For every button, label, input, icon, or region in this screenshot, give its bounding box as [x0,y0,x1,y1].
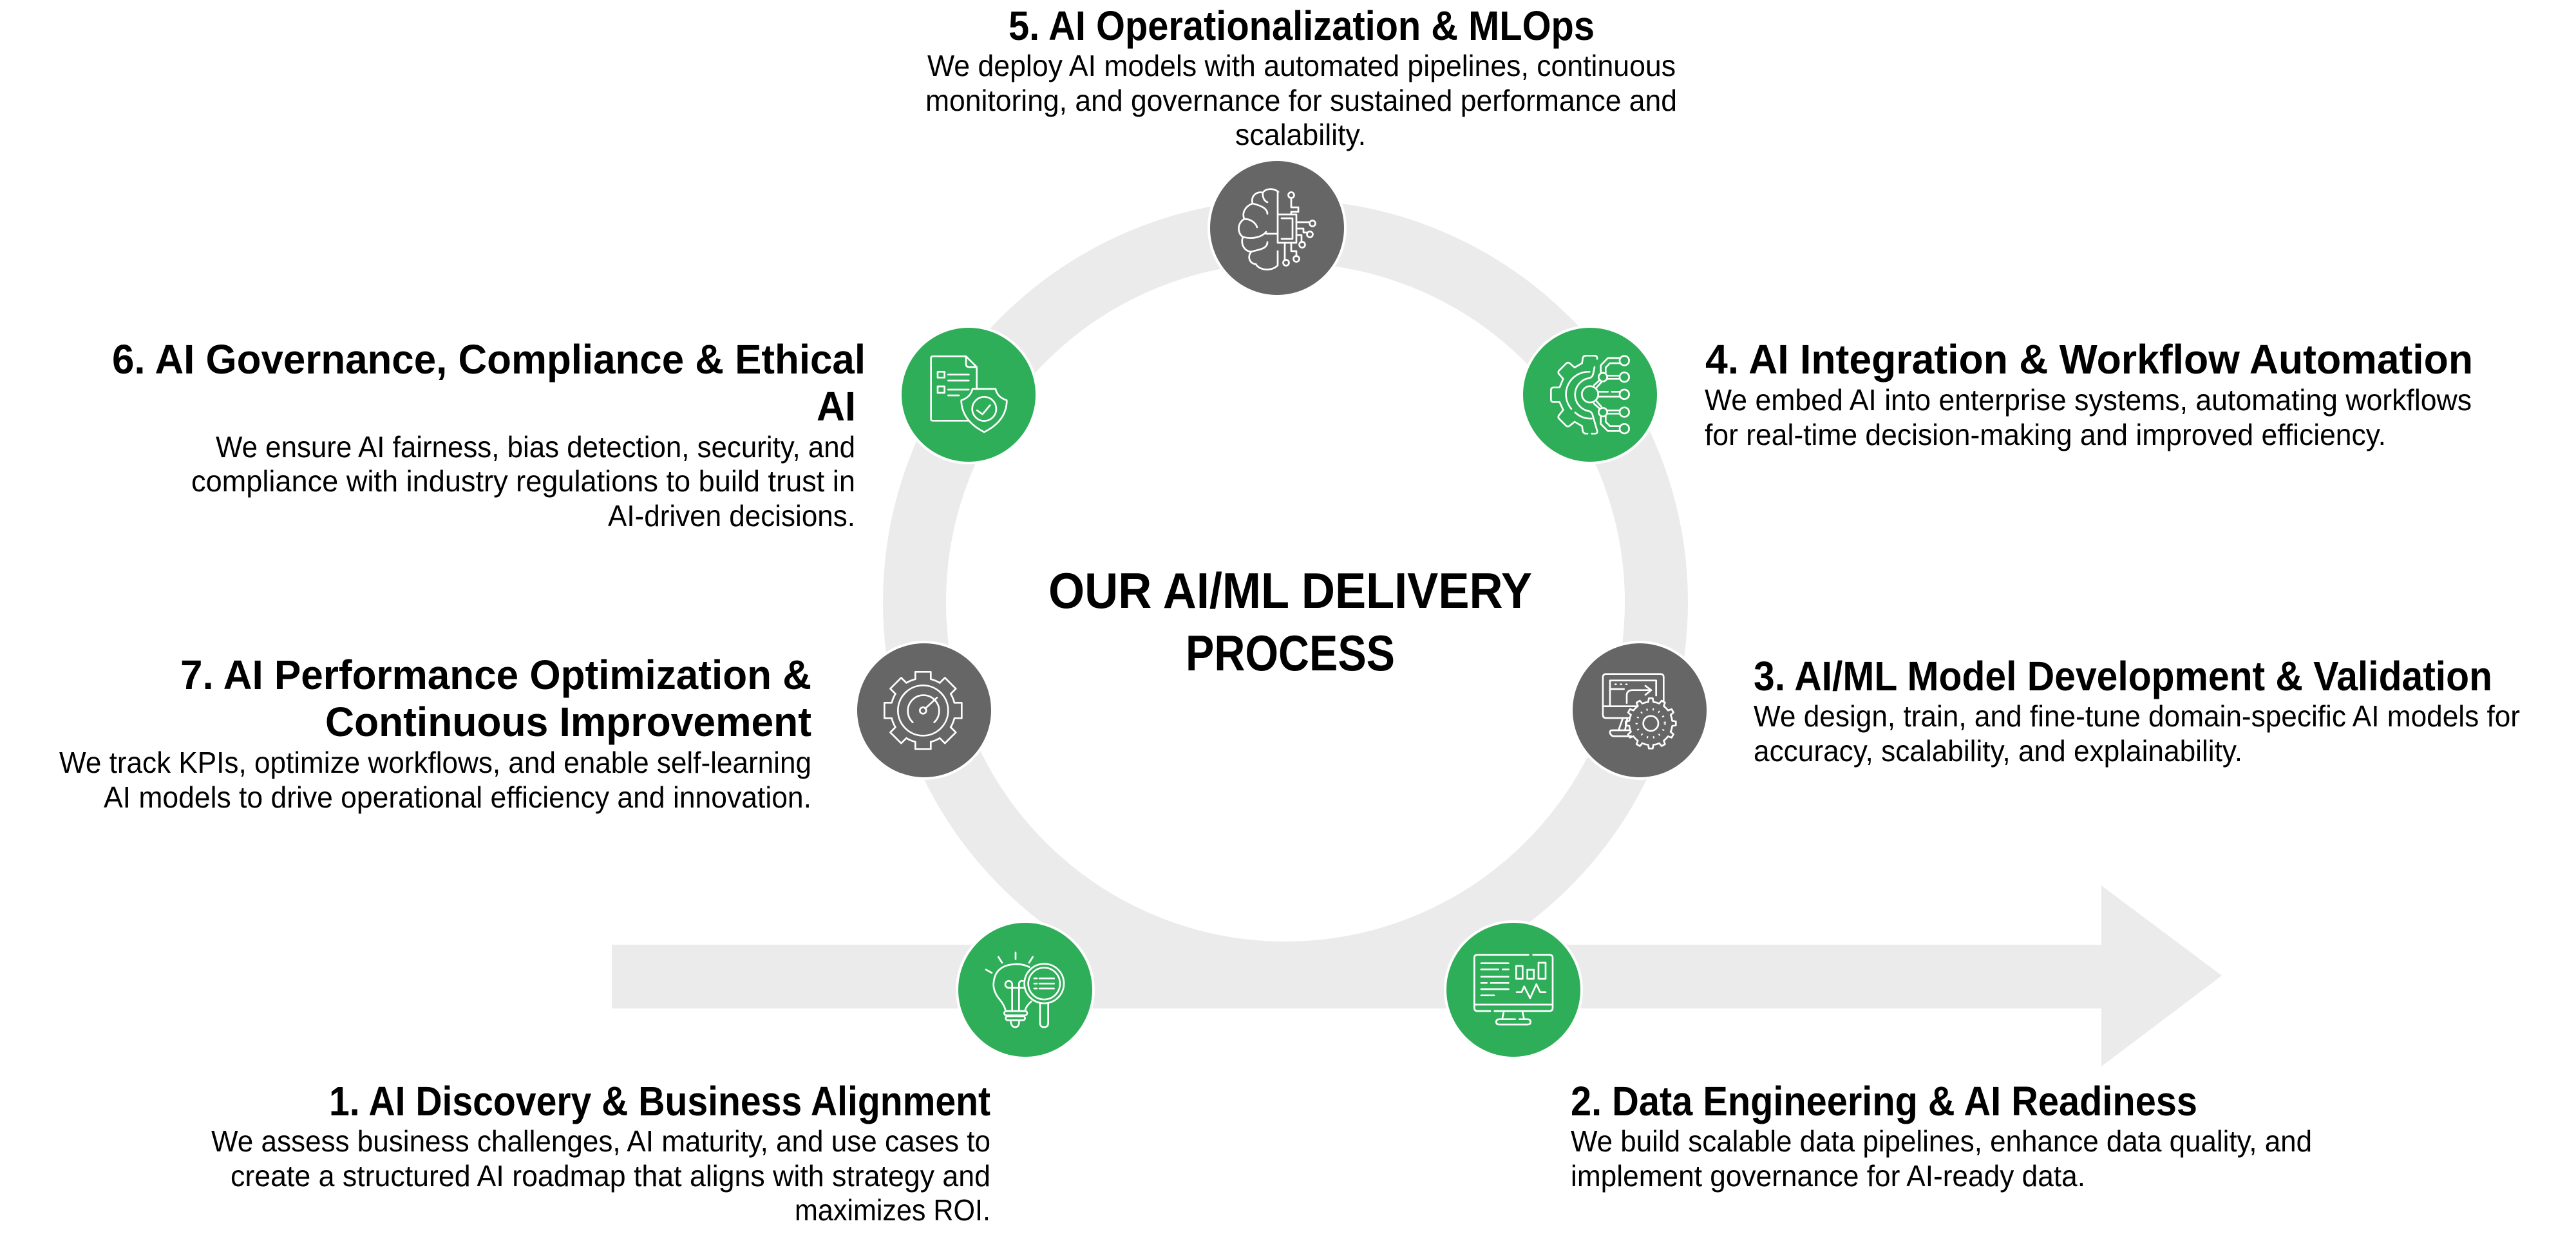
body: step 6: compliance with industry regulations to build trust in [191,464,855,498]
heading: step 7 [180,652,811,745]
body: step 7 [59,746,811,814]
step 5 node: MLOps icon [1208,158,1347,298]
body: step 5: scalability. [1235,118,1366,151]
body: step 3 [1754,699,2520,768]
step 6 node: governance icon [899,325,1038,464]
body: step 4: We embed AI into enterprise systems, automating workflows [1705,383,2472,417]
step 7 text block [59,652,811,814]
body: step 5 [925,49,1677,151]
body: step 2: We build scalable data pipelines, enhance data quality, and [1571,1124,2312,1158]
heading: step 3: 3. AI/ML Model Development & Validation [1754,653,2492,699]
heading: step 6 [112,336,866,430]
body: step 3: accuracy, scalability, and explainability. [1754,734,2242,768]
step 3 node: model development icon [1570,641,1709,780]
step 4 node: integration icon [1520,325,1660,464]
heading: step 1: 1. AI Discovery & Business Alignment [329,1078,990,1124]
body: step 1 [211,1124,990,1227]
step 1 text block [211,1078,990,1227]
body: step 2 [1571,1124,2312,1193]
heading: step 2: 2. Data Engineering & AI Readiness [1571,1078,2197,1124]
ring: circular process track [914,231,1656,973]
step 2 node: data engineering icon [1444,920,1583,1059]
body: step 2: implement governance for AI-ready data. [1571,1159,2085,1193]
body: step 1: create a structured AI roadmap that aligns with strategy and [231,1159,990,1193]
arrow: horizontal timeline arrow [612,885,2222,1066]
body: step 6 [191,430,855,533]
heading: step 7: Continuous Improvement [325,699,811,745]
step 3 text block [1754,653,2520,768]
heading: step 4: 4. AI Integration & Workflow Automation [1705,336,2473,383]
center title: PROCESS [1186,625,1395,681]
step 5 text block [925,3,1677,151]
icon: monitor with gear [1603,674,1677,750]
body: step 1: maximizes ROI. [795,1193,990,1227]
body: step 1: We assess business challenges, AI maturity, and use cases to [211,1124,990,1158]
step 7 node: performance icon [855,641,994,780]
body: step 6: We ensure AI fairness, bias detection, security, and [216,430,855,464]
body: step 4 [1705,383,2472,451]
heading: step 6: 6. AI Governance, Compliance & Ethical [112,336,866,383]
body: step 7: AI models to drive operational efficiency and innovation. [104,780,811,814]
heading: step 5: 5. AI Operationalization & MLOps [1009,3,1595,49]
step 1 node: AI discovery icon [956,920,1095,1059]
icon: gear with circuit [1551,355,1629,433]
heading: step 7: 7. AI Performance Optimization & [180,652,811,698]
icon: brain with circuit [1238,189,1315,270]
body: step 4: for real-time decision-making and improved efficiency. [1705,418,2386,451]
heading: step 6: AI [817,383,856,430]
icon: gear with gauge [884,672,962,750]
center title: OUR AI/ML DELIVERY [1048,562,1532,619]
step 6 text block [112,336,866,533]
icon: document with shield [931,356,1007,432]
step 2 text block [1571,1078,2312,1193]
body: step 3: We design, train, and fine-tune domain-specific AI models for [1754,699,2520,733]
body: step 5: monitoring, and governance for sustained performance and [925,84,1677,117]
icon: light bulb and magnifier [986,952,1064,1027]
icon: dashboard monitor [1474,955,1553,1025]
body: step 5: We deploy AI models with automated pipelines, continuous [927,49,1676,82]
step 4 text block [1705,336,2473,451]
body: step 7: We track KPIs, optimize workflows, and enable self-learning [59,746,811,779]
body: step 6: AI-driven decisions. [608,499,855,533]
center title [1048,562,1532,681]
